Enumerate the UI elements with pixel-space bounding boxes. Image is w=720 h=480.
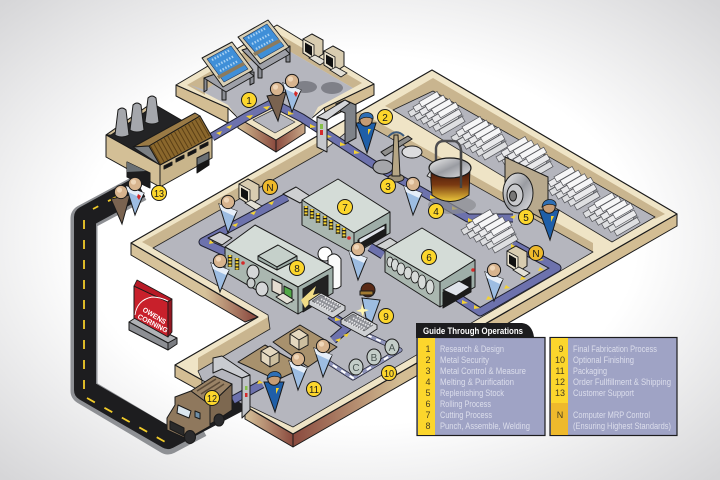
machine 8: punch, assemble, welding xyxy=(208,225,341,314)
number badges: 5 xyxy=(523,213,529,224)
ingot stacks xyxy=(410,94,639,252)
notch box faces xyxy=(238,118,276,152)
legend column 1 xyxy=(417,338,545,436)
legend heading tab xyxy=(416,323,534,338)
legend column 1: 8 xyxy=(425,421,431,431)
wall face: lower left stub xyxy=(175,365,202,392)
number badges: 2 xyxy=(382,113,388,124)
wall face: bottom arm xyxy=(245,406,293,447)
main floor xyxy=(153,121,593,427)
legend column 1: 4 xyxy=(425,377,431,387)
legend column 1: 2 xyxy=(425,355,431,365)
legend column 2: 12 xyxy=(555,377,565,387)
legend column 1: Metal Control & Measure xyxy=(440,366,526,376)
number badges: 4 xyxy=(433,207,439,218)
legend column 1: 5 xyxy=(425,388,431,398)
room floor xyxy=(190,44,353,122)
legend column 1: Rolling Process xyxy=(440,399,491,409)
people xyxy=(111,74,559,412)
delivery truck xyxy=(167,376,232,444)
number badges: 6 xyxy=(426,253,432,264)
legend column 2: Final Fabrication Process xyxy=(573,344,657,354)
finishing drums A B C: B xyxy=(371,353,378,364)
sign: Owens Corning: OWENS xyxy=(141,307,167,326)
legend xyxy=(416,323,677,436)
legend column 1: 3 xyxy=(425,366,431,376)
number badges: 7 xyxy=(342,203,348,214)
number badges: 11 xyxy=(309,385,319,396)
legend column 2: N xyxy=(557,410,563,420)
legend column 2: Optional Finishing xyxy=(573,355,634,365)
legend column 1: Melting & Purification xyxy=(440,377,514,387)
melting pot xyxy=(427,141,476,214)
number badges: N xyxy=(532,249,540,260)
number badges: N xyxy=(266,183,274,194)
main building walls and floor xyxy=(131,70,677,447)
legend column 1: Research & Design xyxy=(440,344,504,354)
table two xyxy=(238,20,290,78)
room wall left face xyxy=(176,85,228,123)
room inner faces xyxy=(187,33,362,95)
road xyxy=(84,187,240,443)
legend column 1: 6 xyxy=(425,399,431,409)
number badges: 9 xyxy=(383,312,389,323)
room wall right face xyxy=(324,84,374,119)
legend column 2: Order Fullfillment & Shipping xyxy=(573,377,671,387)
legend column 2: Customer Support xyxy=(573,388,634,398)
sign: Owens Corning: CORNING xyxy=(136,314,169,335)
product trays xyxy=(309,293,377,337)
legend column 1: 7 xyxy=(425,410,431,420)
sign: Owens Corning xyxy=(129,280,177,350)
conveyor belts xyxy=(203,103,557,400)
finishing drums A B C: A xyxy=(389,343,396,354)
research room xyxy=(176,25,374,152)
notch box floor xyxy=(253,110,295,133)
shipping gate xyxy=(213,356,250,418)
number badges: 10 xyxy=(384,369,394,380)
legend column 2: 11 xyxy=(555,366,565,376)
notch box top xyxy=(238,102,305,140)
legend column 2: Computer MRP Control xyxy=(573,410,650,420)
factory xyxy=(106,96,212,188)
machine 7: cutting xyxy=(283,179,390,254)
finishing drums A B C xyxy=(349,339,399,375)
number badges xyxy=(152,92,544,406)
metal control stand xyxy=(373,132,422,182)
wall face: right arm xyxy=(293,214,677,447)
wall face: left wing xyxy=(131,243,258,322)
legend column 2: 13 xyxy=(555,388,565,398)
number badges: 1 xyxy=(246,96,252,107)
legend column 1: Punch, Assemble, Welding xyxy=(440,421,530,431)
number badges: 12 xyxy=(207,394,217,405)
gate: entrance scanner xyxy=(317,100,356,152)
computers in research room xyxy=(303,34,347,77)
legend heading tab: Guide Through Operations xyxy=(423,326,523,337)
machine 6: rolling xyxy=(376,228,475,308)
legend column 1: Replenishing Stock xyxy=(440,388,504,398)
finishing drums A B C: C xyxy=(352,363,360,374)
legend column 1: Metal Security xyxy=(440,355,489,365)
worker at finishing station xyxy=(356,283,380,322)
packaging tables and boxes xyxy=(238,325,337,380)
number badges: 13 xyxy=(154,189,164,200)
legend column 1: Cutting Process xyxy=(440,410,492,420)
N computers xyxy=(239,179,530,277)
storage floor xyxy=(393,91,655,242)
legend column 2: (Ensuring Highest Standards) xyxy=(573,421,671,431)
legend column 1: 1 xyxy=(425,344,431,354)
inner wall faces xyxy=(142,78,665,372)
wall top xyxy=(131,70,677,434)
solar design tables xyxy=(202,20,290,100)
legend column 2: Packaging xyxy=(573,366,607,376)
legend column 2: 10 xyxy=(555,355,565,365)
legend column 2: 9 xyxy=(558,344,564,354)
legend column 2 xyxy=(550,338,677,436)
number badges: 8 xyxy=(294,264,300,275)
number badges: 3 xyxy=(385,182,391,193)
replenishing stock press xyxy=(503,157,548,222)
room wall top xyxy=(176,25,374,118)
table one xyxy=(202,42,254,100)
